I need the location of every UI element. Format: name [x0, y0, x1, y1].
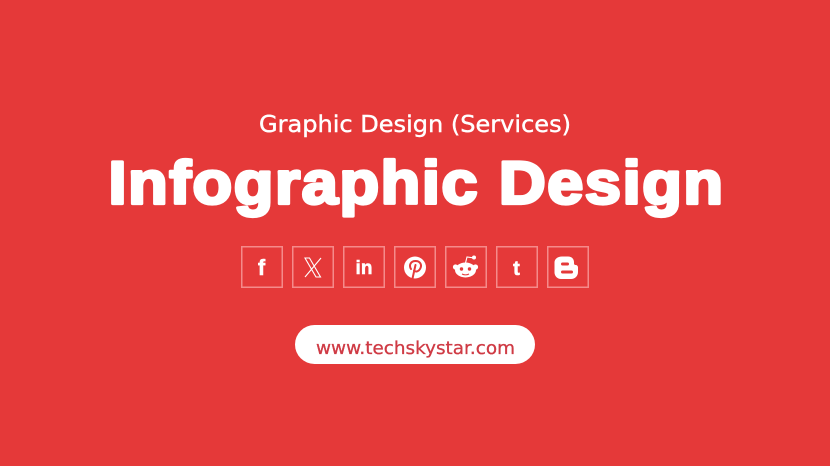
title: Infographic Design	[108, 150, 723, 217]
icon: tumblr	[497, 247, 537, 287]
icon: linkedin: in	[356, 258, 372, 279]
subtitle: Graphic Design (Services)	[259, 112, 571, 138]
icon: pinterest	[395, 247, 435, 287]
icon: reddit	[446, 247, 486, 287]
social icons row	[242, 247, 588, 287]
icon: X	[293, 247, 333, 287]
icon: tumblr: t	[513, 258, 520, 280]
icon: facebook	[242, 247, 282, 287]
icon: blogger	[548, 247, 588, 287]
icon: facebook: f	[258, 255, 266, 280]
website pill	[295, 325, 535, 364]
icon: linkedin	[344, 247, 384, 287]
website url: www.techskystar.com	[316, 338, 515, 359]
